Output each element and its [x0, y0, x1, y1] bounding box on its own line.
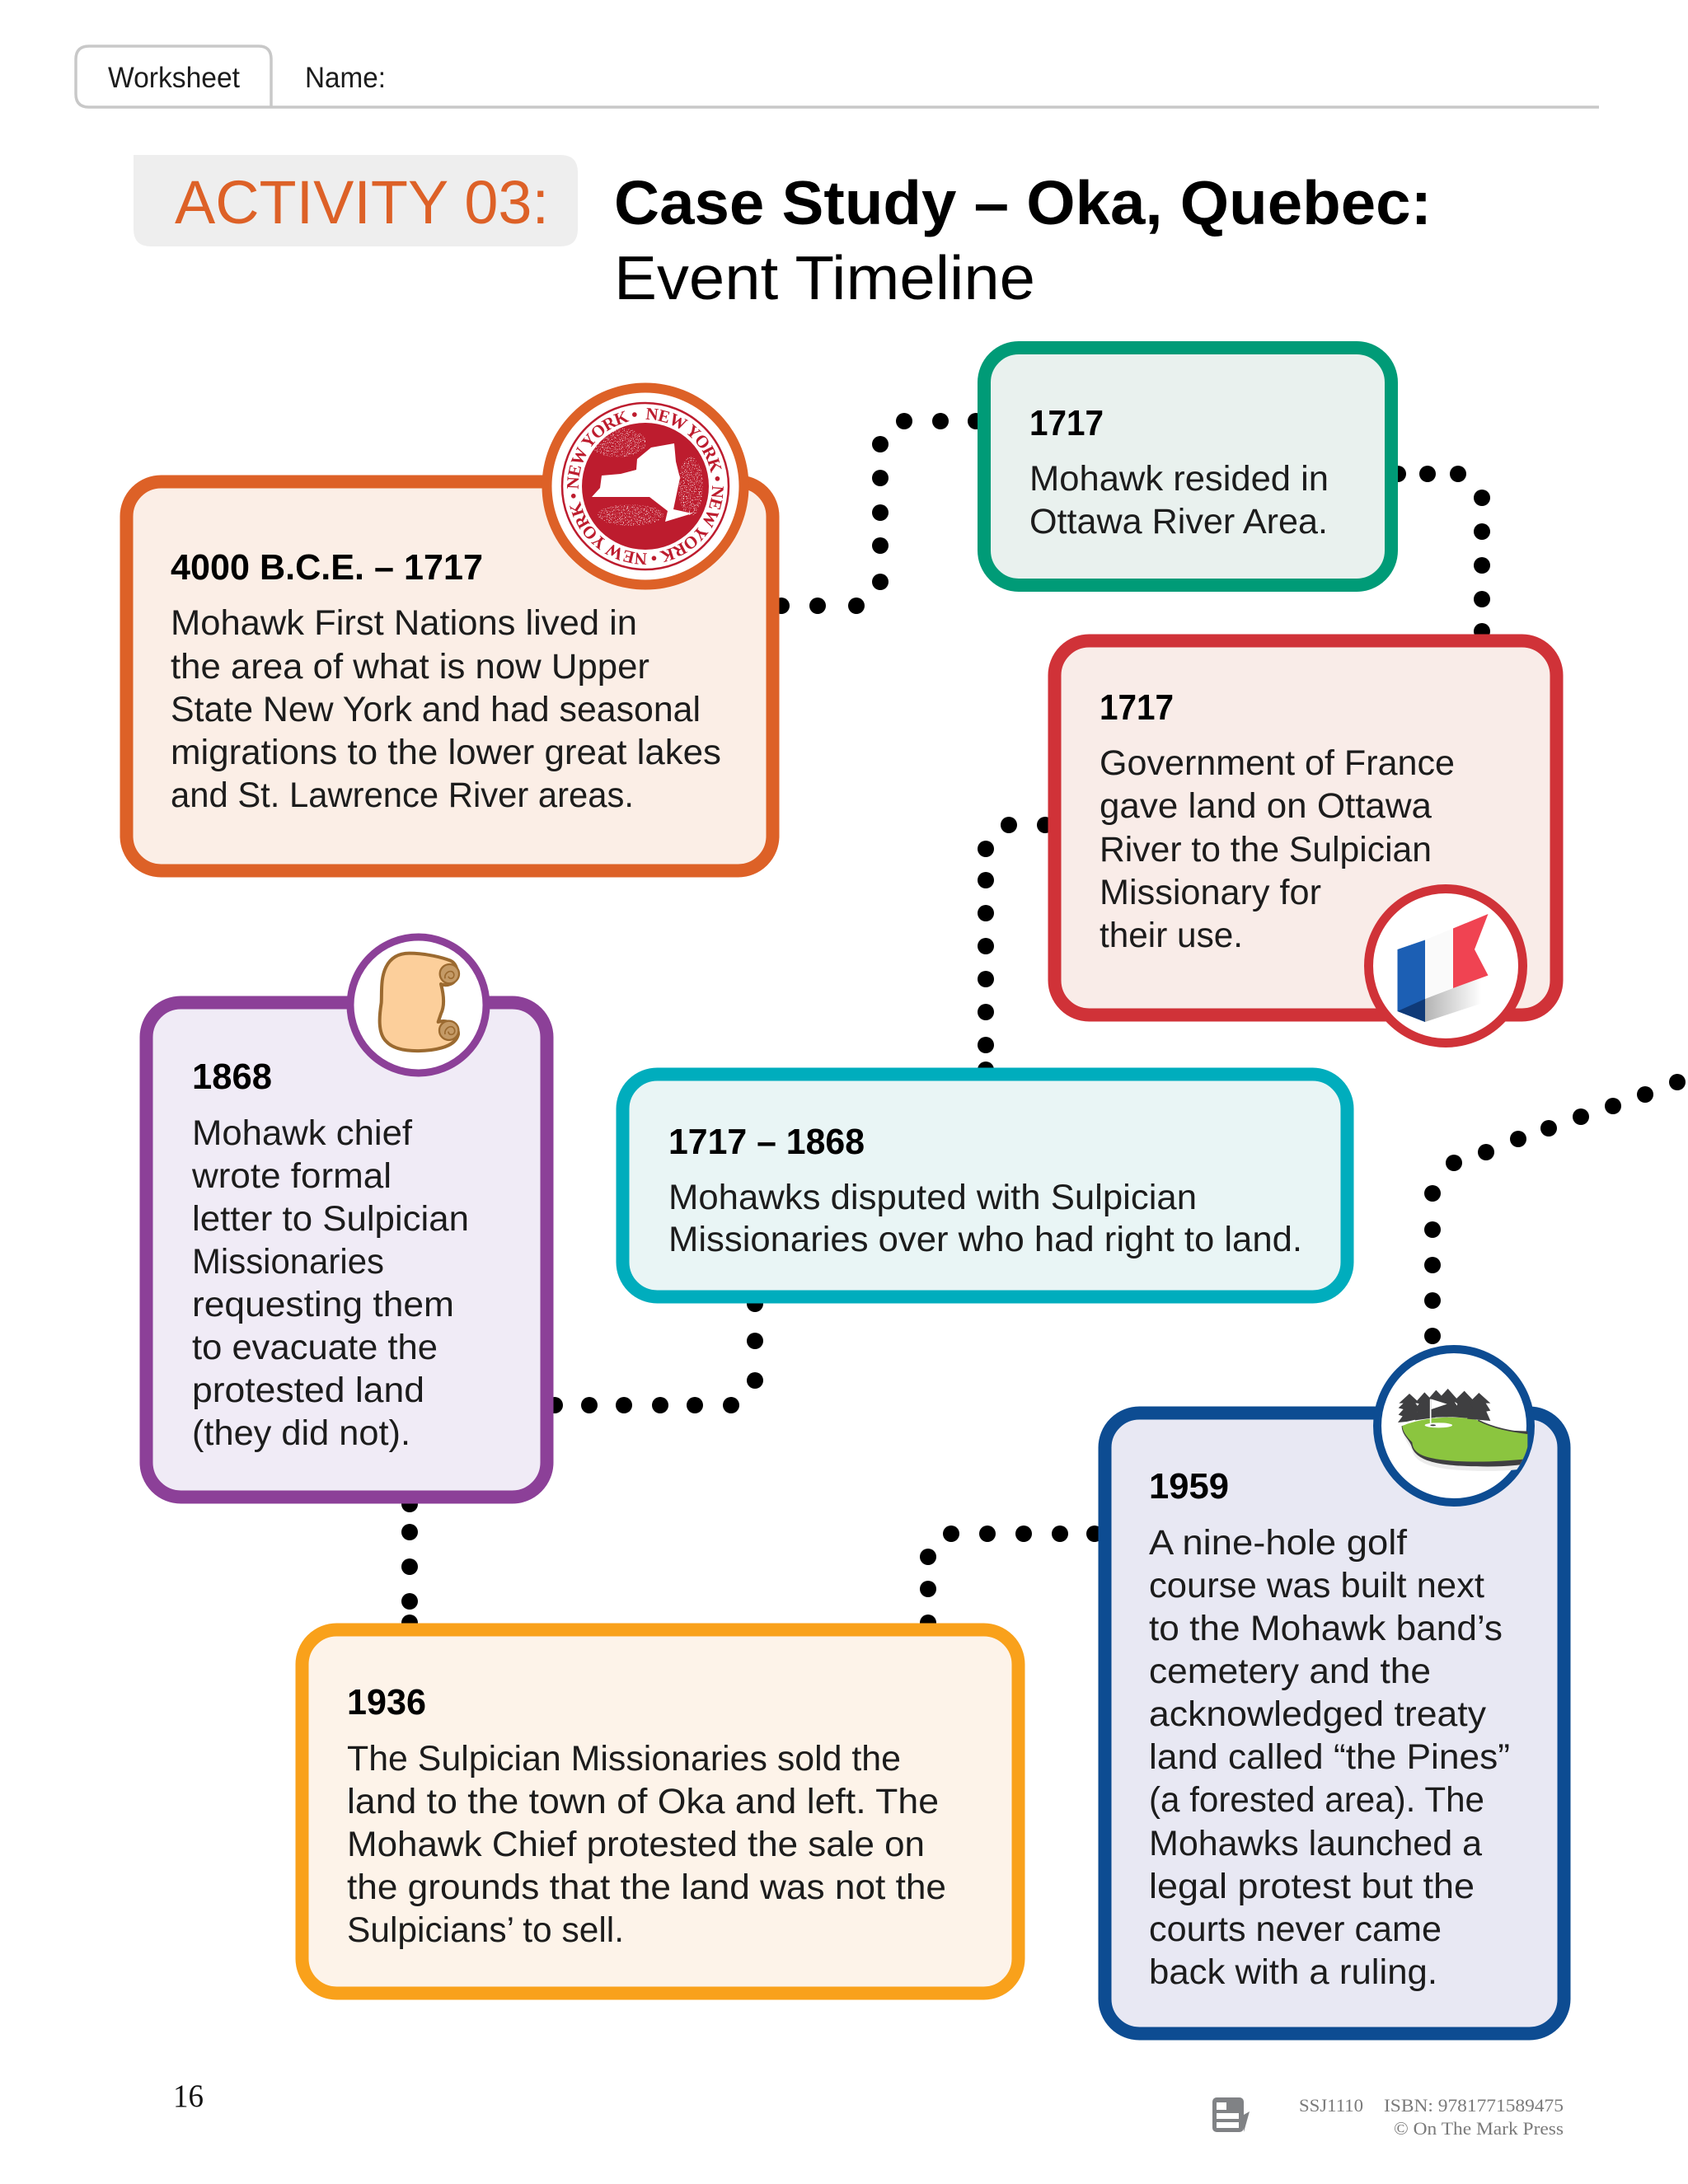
body text: Mohawk resided in: [1029, 459, 1329, 499]
footer: publication info: SSJ1110: [1299, 2095, 1363, 2116]
panel: 4000 B.C.E. – 1717: [120, 382, 780, 877]
panel: 1959 golf course: [1104, 1349, 1564, 2034]
body text: acknowledged treaty: [1149, 1694, 1487, 1734]
footer: publication info: © On The Mark Press: [1394, 2118, 1564, 2139]
panel: 1868 formal letter: [147, 937, 547, 1497]
body text: the area of what is now Upper: [171, 647, 649, 687]
body text: Mohawks disputed with Sulpician: [668, 1178, 1197, 1217]
body text: [191, 1113, 469, 1453]
name label: Name:: [305, 62, 386, 94]
dotted connector: navy card continuing off the page: [1424, 1074, 1686, 1344]
body text: migrations to the lower great lakes: [171, 733, 721, 772]
activity badge: ACTIVITY 03:: [175, 168, 549, 237]
body text: Mohawks launched a: [1149, 1824, 1482, 1863]
icon: French flag: [1368, 888, 1523, 1043]
body text: requesting them: [192, 1285, 454, 1324]
body text: [1100, 743, 1455, 955]
body text: Sulpicians’ to sell.: [347, 1910, 624, 1950]
footer: publication info: ISBN: 9781771589475: [1384, 2095, 1564, 2116]
body text: State New York and had seasonal: [171, 690, 701, 729]
body text: legal protest but the: [1149, 1867, 1475, 1906]
heading: 1868: [192, 1057, 272, 1097]
body text: course was built next: [1149, 1566, 1484, 1605]
body text: The Sulpician Missionaries sold the: [347, 1739, 901, 1779]
dotted connector: yellow card to navy card: [920, 1526, 1103, 1631]
dotted connector: purple card to yellow card: [401, 1496, 418, 1631]
dotted connector: green card to red card: [1390, 466, 1490, 640]
body text: Mohawk chief: [192, 1113, 413, 1153]
body text: to evacuate the: [192, 1328, 438, 1367]
header: worksheet tab and name line: [76, 46, 1599, 107]
dotted connector: teal card to purple card: [546, 1296, 763, 1413]
panel: 1717 Mohawk in Ottawa River area: [984, 348, 1391, 585]
body text: their use.: [1100, 916, 1243, 955]
title: Event Timeline: [614, 243, 1035, 312]
body text: A nine-hole golf: [1149, 1523, 1408, 1563]
body text: [347, 1739, 946, 1950]
body text: [1149, 1523, 1510, 1992]
panel: 1717 Government of France: [1055, 641, 1556, 1043]
body text: Missionary for: [1100, 873, 1321, 912]
heading: 1959: [1149, 1466, 1229, 1507]
dotted connector: red card to teal card: [978, 817, 1053, 1078]
body text: [668, 1178, 1302, 1259]
heading: 4000 B.C.E. – 1717: [171, 547, 483, 588]
icon: publisher logo: [1212, 2097, 1250, 2132]
heading: 1717: [1100, 687, 1174, 728]
icon: paper scroll: [350, 937, 486, 1073]
body text: [1029, 459, 1329, 541]
body text: Ottawa River Area.: [1029, 502, 1328, 541]
title: Case Study – Oka, Quebec:: [614, 168, 1432, 237]
panel: 1936 land sale: [302, 1630, 1019, 1993]
body text: [171, 603, 721, 815]
panel: 1717 – 1868 dispute: [623, 1075, 1347, 1297]
title: [614, 168, 1432, 312]
dotted connector: orange card to green card: [773, 413, 984, 614]
footer: publication info: [1299, 2095, 1564, 2139]
body text: Mohawk First Nations lived in: [171, 603, 637, 643]
body text: protested land: [192, 1371, 424, 1410]
heading: 1717: [1029, 403, 1104, 443]
body text: Mohawk Chief protested the sale on: [347, 1825, 925, 1864]
icon: golf green with trees and flag: [1377, 1349, 1531, 1502]
page number: 16: [173, 2079, 204, 2114]
body text: wrote formal: [191, 1156, 392, 1196]
heading: 1717 – 1868: [668, 1122, 865, 1162]
body text: back with a ruling.: [1149, 1952, 1437, 1992]
body text: (they did not).: [192, 1413, 410, 1453]
body text: (a forested area). The: [1149, 1780, 1484, 1820]
icon: New York stamp: [542, 382, 748, 590]
body text: River to the Sulpician: [1100, 830, 1432, 869]
body text: Missionaries over who had right to land.: [668, 1220, 1302, 1259]
body text: and St. Lawrence River areas.: [171, 776, 634, 815]
body text: land to the town of Oka and left. The: [347, 1782, 939, 1821]
icon: New York stamp: NEW YORK • NEW YORK • NEW YORK • NEW YORK •: [567, 408, 724, 565]
body text: courts never came: [1149, 1910, 1442, 1949]
body text: Missionaries: [192, 1242, 384, 1282]
body text: letter to Sulpician: [192, 1199, 469, 1239]
body text: gave land on Ottawa: [1100, 786, 1432, 826]
body text: land called “the Pines”: [1149, 1737, 1510, 1777]
activity badge: [134, 155, 578, 246]
tab label: Worksheet: [108, 62, 240, 94]
body text: to the Mohawk band’s: [1149, 1609, 1503, 1648]
heading: 1936: [347, 1682, 426, 1722]
body text: Government of France: [1100, 743, 1455, 783]
body text: cemetery and the: [1149, 1652, 1431, 1691]
body text: the grounds that the land was not the: [347, 1868, 946, 1907]
